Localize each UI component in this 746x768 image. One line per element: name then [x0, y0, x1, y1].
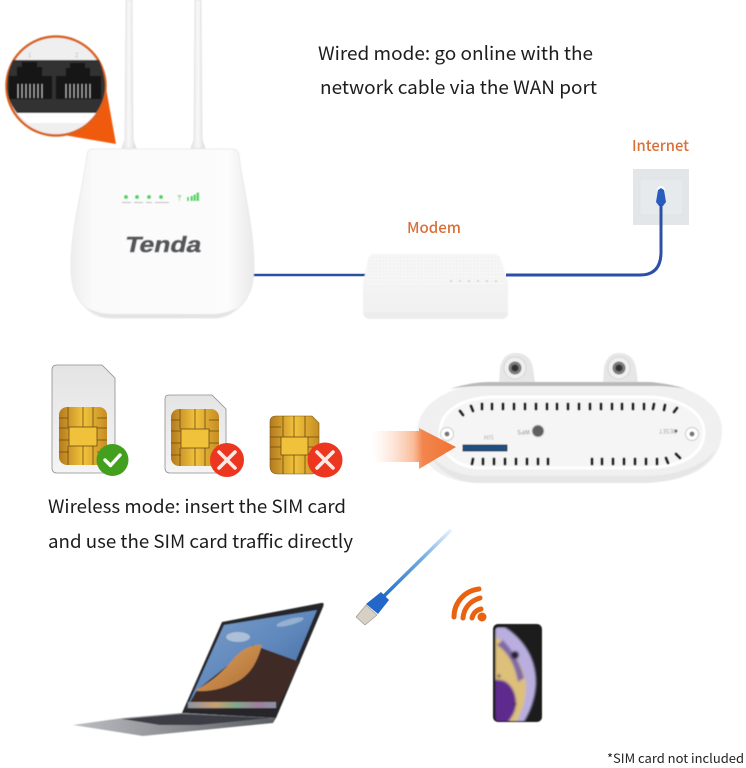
inner lilac band: [497, 640, 524, 682]
arrow pointing to SIM slot: [372, 428, 456, 469]
card: [165, 395, 226, 473]
heading: wireless mode: Wireless mode: insert the SIM card: [48, 493, 346, 519]
shell top edge: [450, 382, 686, 389]
chip: [270, 416, 319, 474]
label: Modem: Modem: [407, 217, 461, 238]
port 2: [56, 63, 101, 99]
wall socket: [633, 169, 689, 225]
port numbers: 1: [28, 50, 31, 59]
router body: [71, 149, 254, 318]
callout: LAN port magnifier: [6, 36, 116, 144]
port pins: [18, 84, 90, 98]
WPS button: [532, 425, 544, 437]
plug head: [356, 605, 377, 625]
ethernet cable: [356, 530, 451, 625]
plug: [656, 188, 666, 206]
SIM label: SIM: [484, 433, 494, 442]
chip: [59, 407, 107, 465]
antenna right: [191, 0, 205, 148]
yellow band: [495, 636, 526, 722]
footnote: *SIM card not included: [607, 748, 744, 767]
SIM slot: [463, 445, 507, 451]
port 1: [9, 62, 52, 99]
router underside: SIM slot view: [417, 353, 722, 483]
cross badge: [210, 443, 244, 477]
network cable: router to modem: [252, 274, 366, 276]
dock: [188, 702, 276, 708]
heading: wired mode: Wired mode: go online with the: [318, 40, 593, 66]
router: [71, 0, 254, 318]
heading: wired mode: network cable via the WAN port: [320, 74, 597, 100]
antenna left: [122, 0, 136, 148]
base: [73, 713, 276, 736]
callout: LAN port magnifier: 2: [75, 50, 79, 59]
callout pointer: [58, 88, 116, 144]
laptop: [73, 603, 324, 736]
lid: [182, 603, 324, 718]
dark hill: [186, 645, 300, 709]
dune: [196, 645, 262, 691]
inner panel: [440, 397, 704, 468]
modem: [363, 254, 508, 319]
keyboard: [122, 714, 270, 725]
vent slots bottom: [472, 454, 680, 464]
plug boot: [366, 592, 389, 614]
status lights: [124, 192, 199, 201]
light labels: [122, 202, 169, 203]
RESET label: RESET: [659, 427, 677, 436]
icon: wifi: [454, 589, 486, 622]
Tenda logo: Tenda: [123, 232, 205, 257]
label: Internet: Internet: [632, 135, 689, 156]
screws: [440, 428, 454, 440]
network cable: modem to wall socket: [506, 205, 661, 275]
vent slots top: [460, 404, 677, 415]
cross badge: [308, 442, 342, 478]
body bottom shading: [85, 307, 240, 318]
purple core: [495, 680, 516, 722]
clouds: [226, 632, 250, 642]
port panel: [7, 60, 105, 113]
callout circle: [6, 36, 106, 136]
heading: wireless mode: and use the SIM card traffic directly: [48, 528, 353, 554]
screen: [186, 610, 317, 709]
outer shell: [417, 382, 722, 483]
router underside: SIM slot view: WPS: [517, 428, 530, 437]
SIM card: micro, rejected: [165, 395, 244, 477]
modem lights: [450, 280, 497, 282]
SIM card: nano, rejected: [270, 416, 342, 478]
check badge: [96, 444, 128, 476]
heading: wired mode: [318, 40, 597, 100]
SIM card: standard, accepted: [52, 365, 128, 476]
antenna stubs: [499, 353, 638, 383]
chip: [171, 409, 219, 466]
heading: wireless mode: [48, 493, 353, 554]
smartphone: [493, 624, 542, 722]
planet rim: [495, 627, 536, 722]
card: [52, 365, 115, 473]
